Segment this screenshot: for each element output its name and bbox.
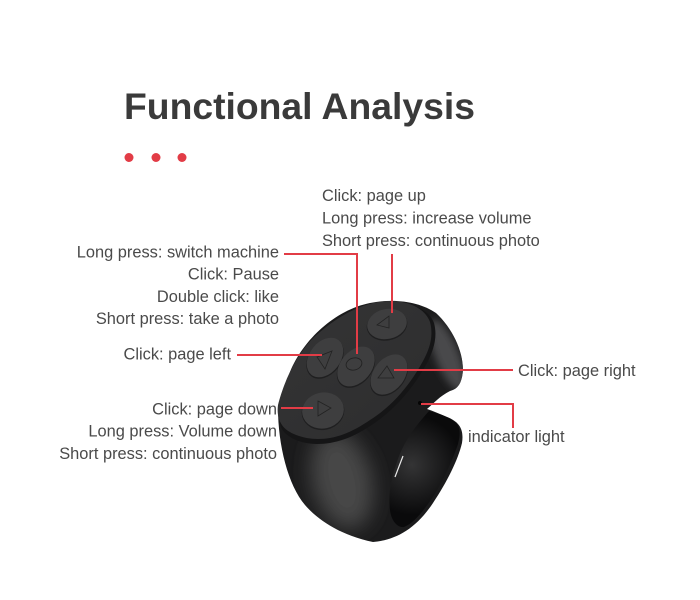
label: page right: Click: page right	[518, 362, 636, 380]
button: page right	[362, 347, 416, 403]
leader lines	[237, 254, 513, 428]
ring band inner	[389, 411, 460, 527]
button: center	[329, 339, 383, 395]
label: center button: Click: Pause	[188, 266, 279, 284]
product: ring remote	[278, 300, 463, 542]
label: center button	[77, 244, 279, 328]
leader: page left	[237, 354, 322, 356]
band highlight	[395, 456, 403, 477]
label: center button: Double click: like	[157, 288, 279, 306]
red dots	[124, 153, 186, 162]
ring body	[278, 300, 463, 542]
label: page down: Short press: continuous photo	[59, 445, 277, 463]
label: page down: Click: page down	[152, 400, 277, 418]
leader: page up	[391, 254, 393, 313]
label: page up: Short press: continuous photo	[322, 232, 540, 250]
label: page up: Click: page up	[322, 187, 426, 205]
label: page up: Long press: increase volume	[322, 210, 532, 228]
label: page left: Click: page left	[124, 346, 231, 364]
leader: page right	[394, 369, 513, 371]
indicator light dot	[418, 401, 422, 405]
leader: indicator light	[421, 404, 513, 428]
label: page down: Long press: Volume down	[88, 422, 277, 440]
title: Functional Analysis	[124, 85, 475, 127]
label: page down	[59, 400, 277, 463]
leader: page down	[281, 407, 313, 409]
label: page up	[322, 187, 540, 250]
button: page down	[298, 389, 348, 434]
leader: center button	[284, 254, 357, 354]
label: center button: Long press: switch machine	[77, 244, 279, 262]
label: center button: Short press: take a photo	[96, 310, 279, 328]
button: page left	[299, 331, 351, 386]
label: indicator light: indicator light	[468, 428, 565, 446]
top face	[279, 302, 435, 444]
button: page up	[364, 305, 410, 344]
